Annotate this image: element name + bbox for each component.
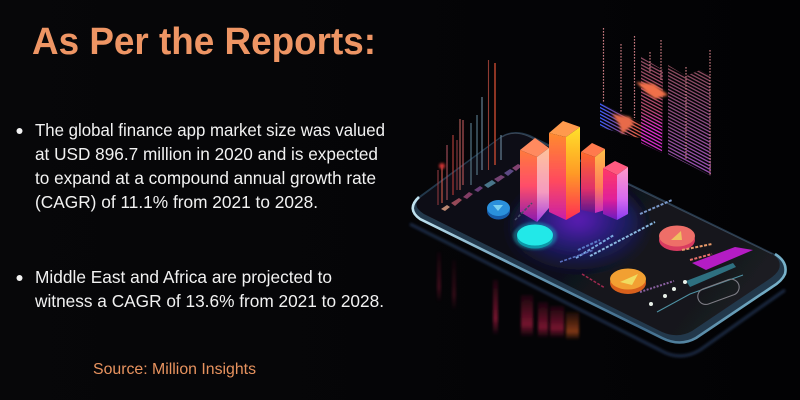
far rim	[502, 133, 772, 254]
home button	[696, 277, 741, 307]
bar chart: bar 4	[603, 161, 628, 220]
reflection under phone	[410, 224, 785, 356]
bullet list: Middle East and Africa: Middle East and Africa are projected to	[35, 267, 332, 287]
bullet list: market size	[16, 120, 385, 212]
hologram chart	[600, 28, 711, 176]
orange button	[610, 268, 646, 294]
title: As Per the Reports:	[32, 21, 376, 63]
bullet list: market size: at USD 896.7 million in 2020 and is expected	[35, 144, 378, 164]
bar chart: bar 1	[520, 138, 549, 222]
smartphone	[411, 60, 786, 342]
blue button	[487, 200, 510, 220]
bullet list: Middle East and Africa	[16, 267, 384, 311]
screen data readouts	[515, 200, 672, 288]
progress strip	[640, 244, 753, 292]
bullet list: Middle East and Africa: witness a CAGR of 13.6% from 2021 to 2028.	[34, 291, 384, 311]
left line chart	[438, 60, 501, 205]
red button	[659, 226, 695, 251]
cyan button	[513, 222, 557, 250]
red glow dot	[439, 163, 445, 169]
source: Source: Million Insights	[93, 361, 256, 378]
phone screen	[416, 133, 780, 335]
screen glow	[512, 184, 644, 272]
slider line	[657, 275, 743, 312]
bar chart: bar 2	[549, 121, 580, 220]
near rim	[413, 197, 786, 342]
bar chart: bar 3	[581, 143, 605, 213]
bullet list: market size: (CAGR) of 11.1% from 2021 to 2028.	[35, 192, 318, 212]
bullet list: market size: to expand at a compound annual growth rate	[35, 168, 376, 188]
menu tiles row	[441, 164, 522, 211]
bullet list: market size: The global finance app market size was valued	[35, 120, 385, 140]
phone body	[411, 132, 786, 342]
slider dots	[649, 280, 687, 306]
